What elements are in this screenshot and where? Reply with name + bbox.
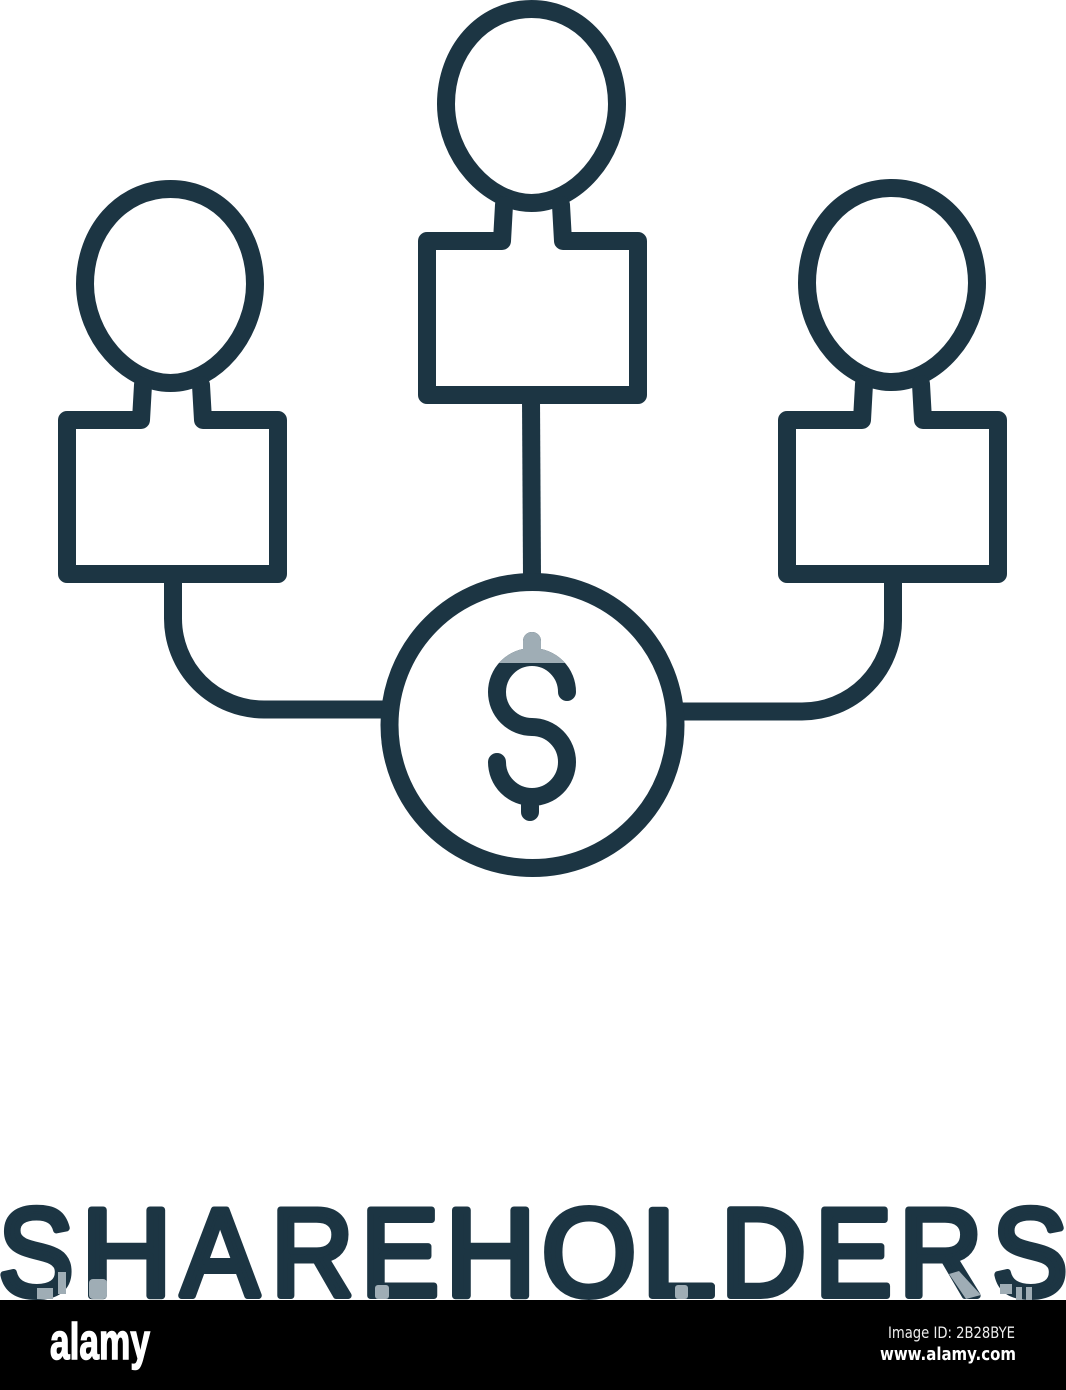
website: www.alamy.com (880, 1344, 1016, 1365)
icon: left person (67, 189, 278, 574)
centre head (446, 9, 617, 203)
title: E (361, 1184, 439, 1322)
image id: Image ID: 2B28BYE (888, 1323, 1015, 1342)
title: A (181, 1184, 259, 1322)
logo: alamy: alamy (50, 1313, 150, 1370)
dollar watermark overlay (499, 632, 565, 663)
title: D (721, 1184, 806, 1322)
connector: right person to coin (680, 578, 893, 712)
title: O (542, 1184, 636, 1322)
title: R (271, 1184, 354, 1322)
title: L (642, 1184, 716, 1322)
connector: left person to coin (173, 578, 386, 710)
title: H (445, 1184, 536, 1322)
title: H (81, 1184, 172, 1322)
right body (787, 384, 998, 574)
title: R (899, 1184, 983, 1322)
connector: centre person to coin (531, 398, 532, 578)
right head (807, 188, 977, 382)
icon: shareholders network (67, 9, 998, 868)
title (0, 1184, 1066, 1322)
icon: centre person (427, 9, 638, 395)
icon: right person (787, 188, 998, 574)
centre body (427, 205, 638, 395)
left body (67, 385, 278, 574)
left head (85, 189, 255, 383)
icon: dollar coin (390, 582, 676, 868)
title: S (0, 1184, 74, 1322)
title: E (815, 1184, 892, 1322)
footer bar (0, 1300, 1066, 1390)
title watermark traces (37, 1271, 1032, 1300)
dollar sign (497, 641, 567, 812)
coin circle (390, 582, 676, 868)
